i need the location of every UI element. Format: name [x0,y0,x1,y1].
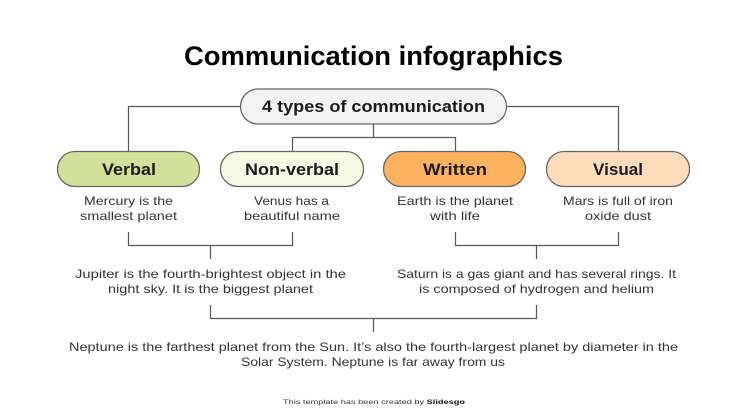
node: Written [384,152,526,186]
text: Mercury [80,194,178,223]
node: Verbal: Verbal [102,160,156,179]
text: Saturn: is composed of hydrogen and helium [419,282,654,296]
connector: Jupiter and Saturn bracket [210,305,536,332]
text: Earth: Earth is the planet [397,194,514,208]
text: Saturn [397,267,677,296]
text: Jupiter [75,267,346,296]
text: Mercury: smallest planet [80,209,178,223]
connector: Verbal and Non-verbal bracket [128,232,292,259]
text: Mars: Mars is full of iron [563,194,673,208]
footer credit: This template has been created by Slidesgo [283,399,465,406]
text: Saturn: Saturn is a gas giant and has several rings. It [397,267,677,281]
text: Venus: beautiful name [244,209,340,223]
node: Written: Written [423,160,487,179]
connector: root to the four types [128,106,618,151]
text: Earth: with life [429,209,480,223]
text: Earth [397,194,514,223]
text: Venus: Venus has a [254,194,329,208]
text: Neptune: Neptune is the farthest planet from the Sun. It’s also the fourth-largest planet by diameter in the [69,340,678,354]
text: Mercury: Mercury is the [84,194,173,208]
text: Mars: oxide dust [585,209,652,223]
root node: 4 types of communication: 4 types of communication [262,97,485,116]
node: Non-verbal [220,152,364,186]
text: Venus [244,194,340,223]
root node: 4 types of communication [240,89,506,124]
text: Mars [563,194,673,223]
node: Non-verbal: Non-verbal [245,160,339,179]
text: Jupiter: night sky. It is the biggest planet [108,282,314,296]
title: Communication infographics [184,41,563,71]
node: Verbal [58,152,200,186]
node: Visual [546,152,690,186]
connector: Written and Visual bracket [456,232,618,259]
text: Neptune [69,340,678,369]
text: Neptune: Solar System. Neptune is far away from us [241,355,505,369]
node: Visual: Visual [593,160,643,179]
text: Jupiter: Jupiter is the fourth-brightest object in the [75,267,346,281]
